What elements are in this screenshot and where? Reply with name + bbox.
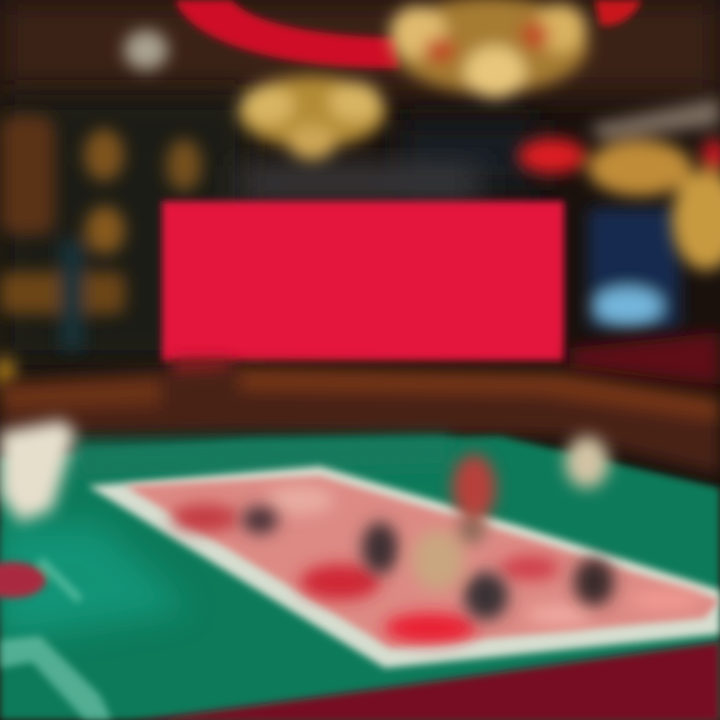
wooden bar counter <box>0 366 720 474</box>
betting layout <box>88 454 720 668</box>
right red and gold decoration <box>518 98 720 385</box>
layout pink field <box>125 476 720 648</box>
dark red table edge <box>130 642 720 720</box>
gold chandelier: top <box>390 0 588 98</box>
lower left table markings <box>0 560 112 720</box>
casino chips <box>242 454 614 620</box>
green table felt <box>0 436 720 720</box>
layout red squares <box>171 486 701 643</box>
blue screen <box>588 208 680 330</box>
playing cards <box>0 420 609 522</box>
left wall shelves <box>0 115 202 388</box>
red ceiling arc <box>175 0 642 68</box>
layout white border <box>88 466 720 668</box>
red screen <box>162 201 564 394</box>
gold chandelier: centre <box>238 76 386 160</box>
